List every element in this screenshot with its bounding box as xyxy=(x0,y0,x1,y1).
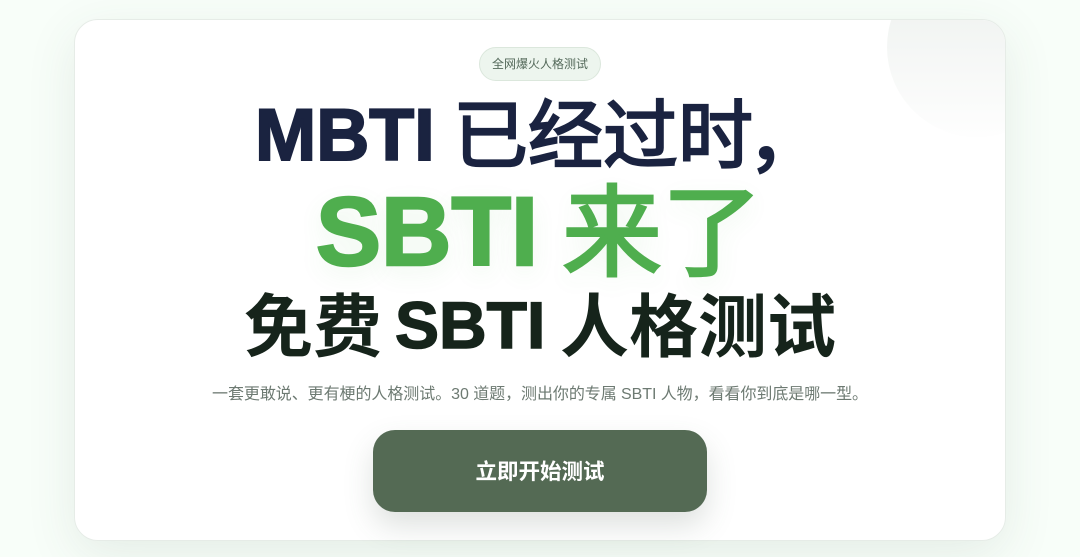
badge xyxy=(479,47,601,81)
heading line 1: ， xyxy=(745,77,820,186)
heading line 3: SBTI xyxy=(395,288,545,362)
heading line 3 xyxy=(244,271,836,371)
heading line 1: MBTI xyxy=(255,93,435,176)
subtitle: 一套更敢说、更有梗的人格测试。30 道题，测出你的专属 SBTI 人物，看看你到底是哪一型。 xyxy=(212,386,868,403)
decorative corner circle xyxy=(887,0,1067,137)
button: start test xyxy=(373,430,707,512)
badge: 全网爆火人格测试 xyxy=(492,57,588,71)
heading line 1 xyxy=(255,75,820,186)
heading line 2 xyxy=(316,152,762,297)
heading line 3: 免费 xyxy=(244,271,382,371)
heading line 3: 人格测试 xyxy=(560,271,836,371)
heading line 1: 已经过时 xyxy=(453,75,753,184)
heading line 2: 来了 xyxy=(562,152,762,297)
heading line 2: SBTI xyxy=(316,177,538,286)
button: start test: 立即开始测试 xyxy=(475,460,604,484)
